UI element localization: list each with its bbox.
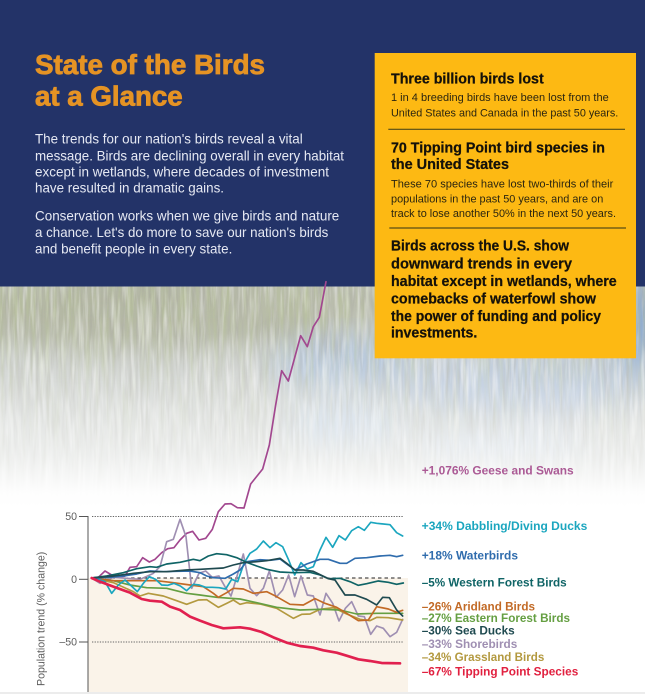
y axis: Population trend (% change) [36, 552, 48, 686]
finding: 70 tipping point species [391, 140, 616, 220]
series labels: –30% Sea Ducks [422, 624, 515, 638]
panel: key findings callout [375, 53, 636, 358]
series labels: –26% Aridland Birds [422, 600, 535, 614]
line: waterbirds [92, 555, 403, 578]
finding: downward trends except wetlands [391, 238, 617, 342]
intro text: trends: message. Birds are declining overall in every habitat [35, 148, 344, 163]
line: western forest birds [92, 554, 403, 585]
finding: 70 tipping point species: These 70 species have lost two-thirds of their [391, 179, 614, 191]
finding: three billion birds lost: Three billion birds lost [391, 71, 544, 87]
series labels [422, 463, 588, 678]
finding: downward trends except wetlands: investments. [391, 326, 477, 342]
series labels: +34% Dabbling/Diving Ducks [422, 519, 588, 533]
finding: downward trends except wetlands: comebacks of waterfowl show [391, 292, 596, 308]
series labels: –5% Western Forest Birds [422, 576, 567, 590]
line: shorebirds [92, 519, 403, 637]
line chart: population trends [36, 282, 408, 692]
intro text: conservation [35, 208, 339, 256]
line: grassland birds [92, 578, 403, 621]
finding: three billion birds lost: United States and Canada in the past 50 years. [391, 108, 618, 120]
line: dabbling and diving ducks [92, 522, 403, 593]
y axis [36, 511, 88, 692]
series labels: –34% Grassland Birds [422, 650, 545, 664]
navy header band [0, 0, 645, 286]
line: geese and swans [92, 282, 326, 578]
line: eastern forest birds [92, 578, 403, 614]
intro text: conservation: and benefit people in every state. [35, 241, 232, 256]
line: aridland birds [92, 578, 403, 621]
finding: 70 tipping point species: populations in the past 50 years, and are on [391, 194, 603, 206]
intro text: conservation: Conservation works when we give birds and nature [35, 208, 339, 223]
series labels: +18% Waterbirds [422, 548, 518, 562]
finding: three billion birds lost [391, 71, 618, 120]
line: sea ducks [92, 558, 403, 616]
intro text: trends: except in wetlands, where decades of investment [35, 165, 329, 180]
finding: 70 tipping point species: 70 Tipping Point bird species in [391, 140, 605, 156]
y axis: 50 [65, 511, 77, 523]
finding: downward trends except wetlands: the power of funding and policy [391, 309, 602, 325]
intro text: conservation: a chance. Let's do more to save our nation's birds [35, 225, 328, 240]
wetland photo background fading to white [0, 286, 645, 482]
title: at a Glance [35, 80, 183, 111]
series labels: –27% Eastern Forest Birds [422, 611, 570, 625]
finding: downward trends except wetlands: habitat except in wetlands, where [391, 274, 617, 290]
finding: 70 tipping point species: track to lose another 50% in the next 50 years. [391, 208, 616, 220]
trend lines [92, 282, 403, 663]
line: tipping point species [92, 578, 400, 663]
finding: three billion birds lost: 1 in 4 breeding birds have been lost from the [391, 92, 609, 104]
series labels: +1,076% Geese and Swans [422, 463, 574, 477]
finding: 70 tipping point species: the United States [391, 157, 509, 173]
intro text: trends: have resulted in dramatic gains. [35, 181, 224, 196]
title [35, 49, 265, 111]
title: State of the Birds [35, 49, 265, 80]
series labels: –67% Tipping Point Species [422, 664, 579, 678]
finding: downward trends except wetlands: Birds across the U.S. show [391, 238, 569, 254]
y axis: 0 [71, 574, 77, 586]
intro text: trends [35, 131, 344, 196]
y axis: –50 [59, 636, 77, 648]
finding: downward trends except wetlands: downward trends in every [391, 256, 573, 272]
series labels: –33% Shorebirds [422, 637, 518, 651]
intro text: trends: The trends for our nation's birds reveal a vital [35, 131, 303, 146]
